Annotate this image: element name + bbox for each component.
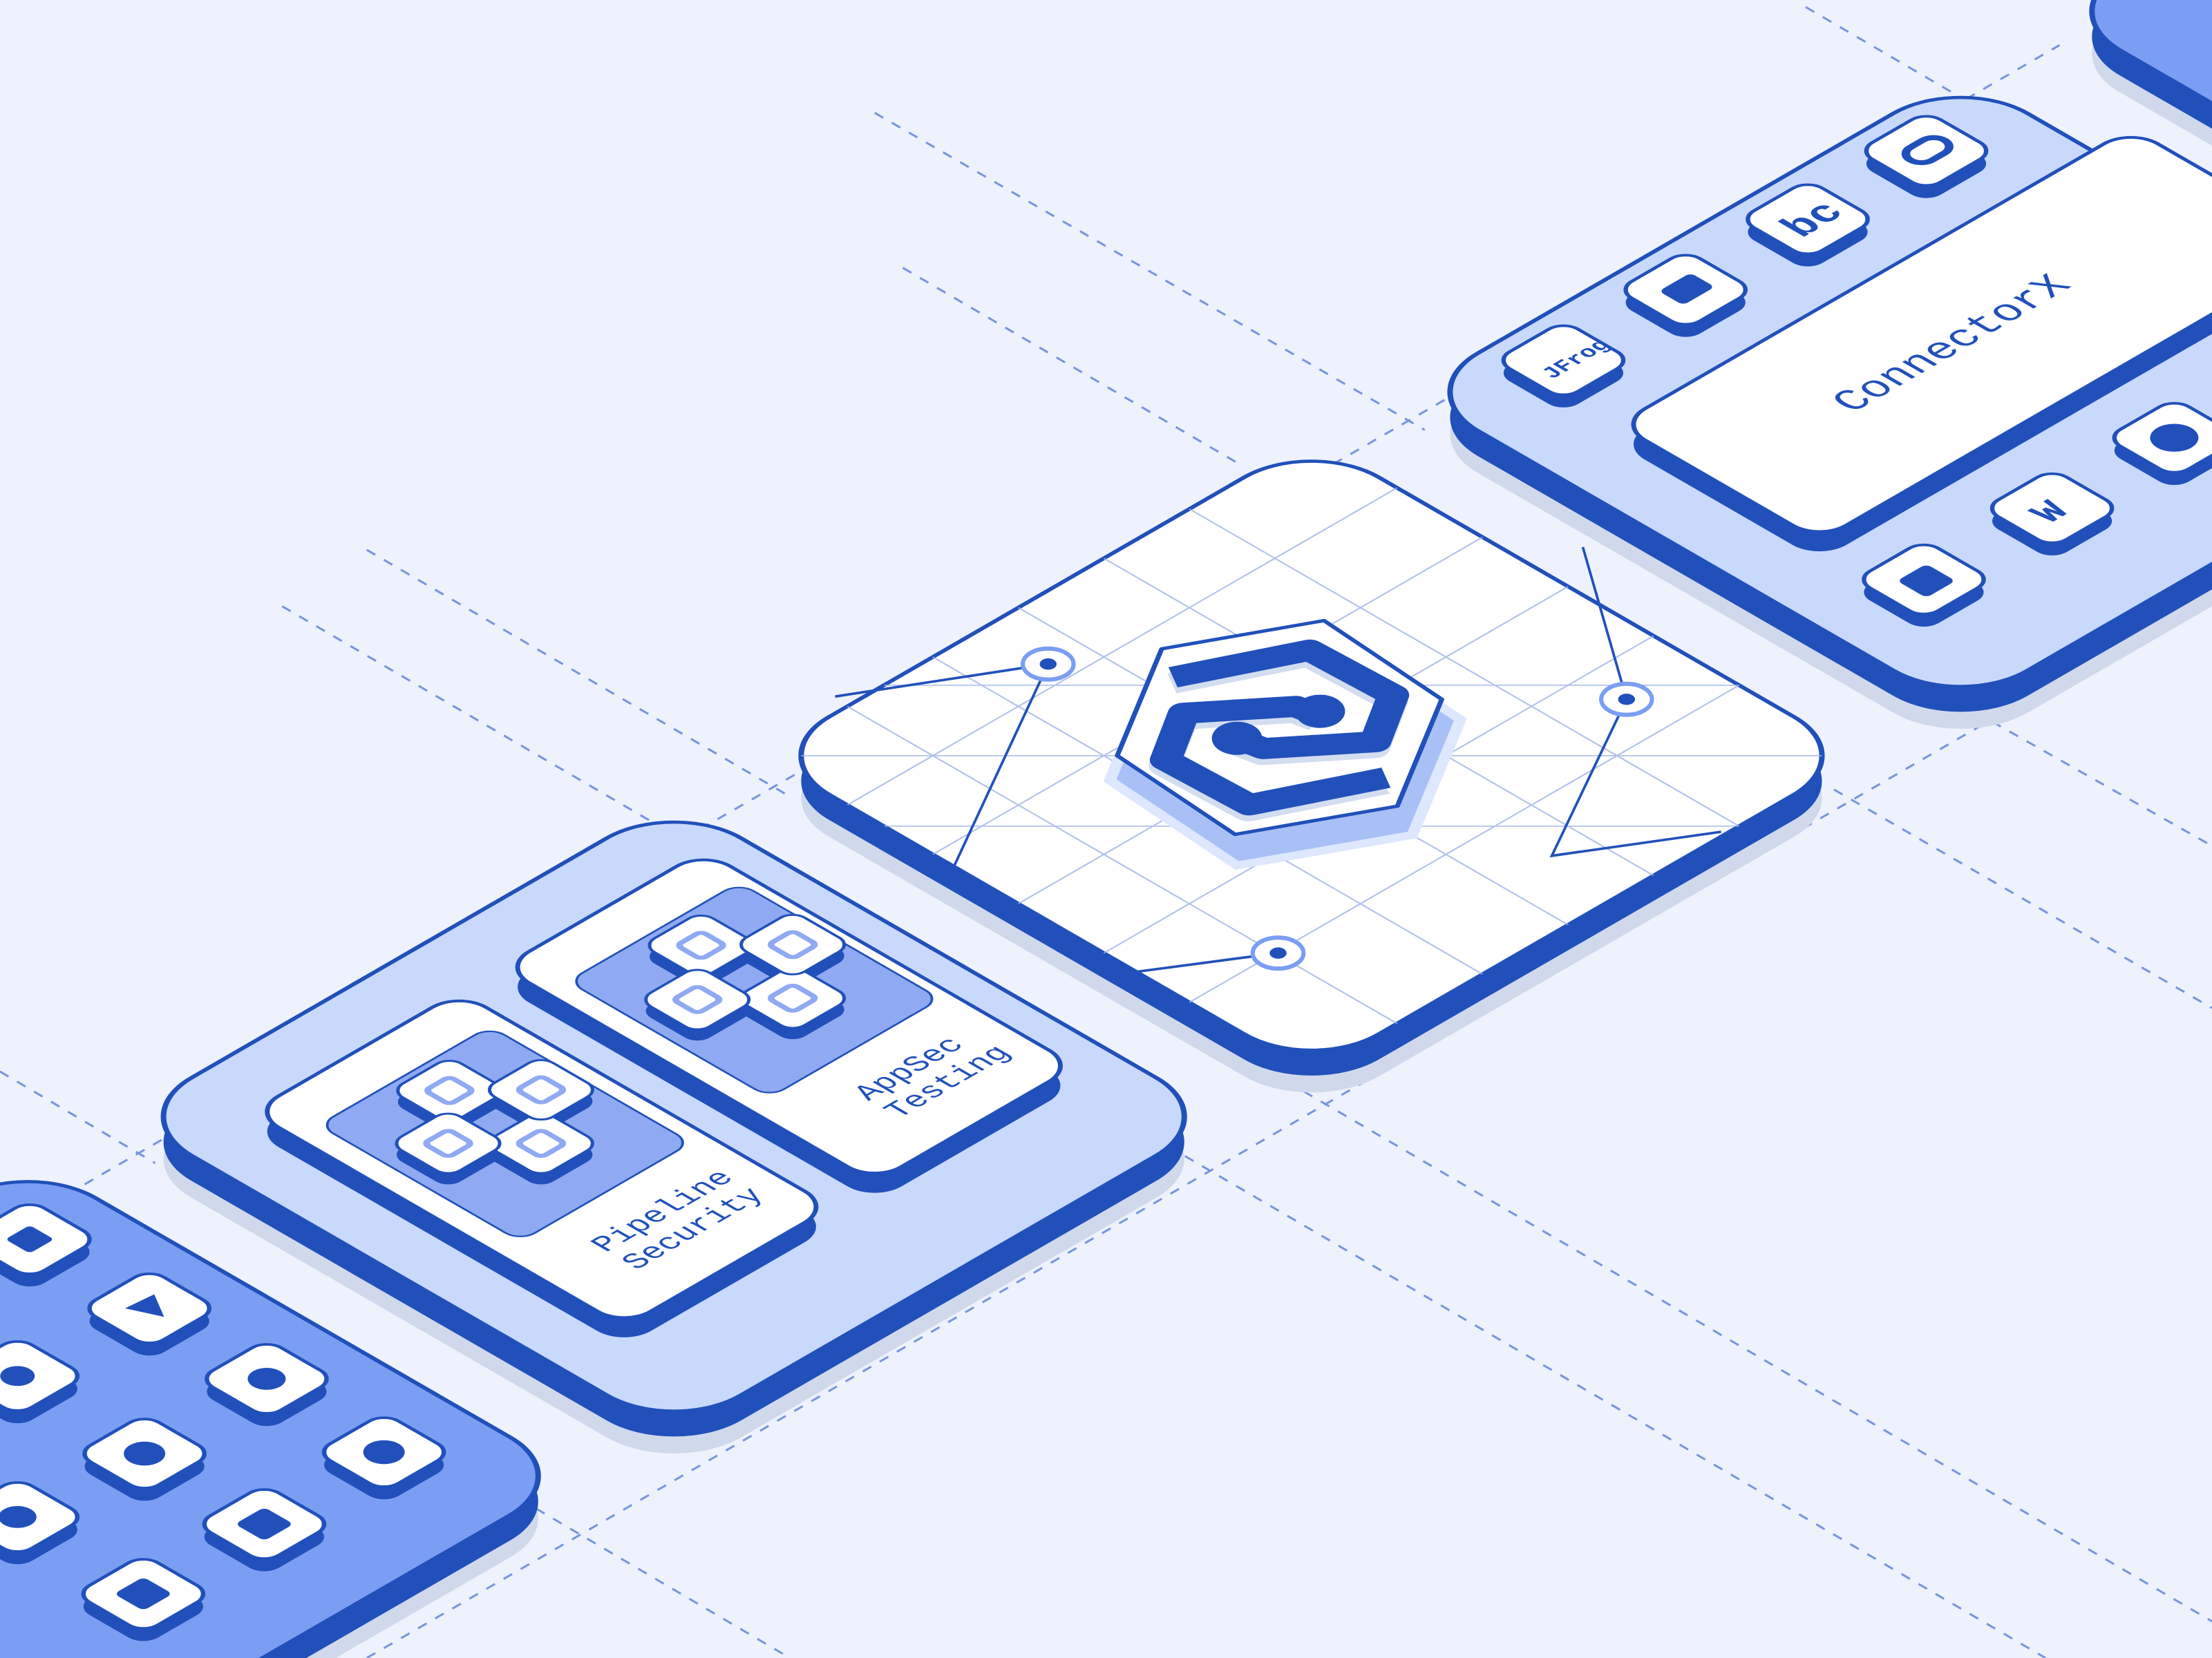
- icons: integrations: [1485, 111, 2212, 633]
- tile: pipeline / appsec: [124, 799, 1224, 1476]
- panel: Pipeline Security: Pipeline: [584, 1166, 743, 1257]
- icon: central hex logo: [1062, 607, 1508, 886]
- icons: integrations: JFrog: [1536, 336, 1617, 383]
- panel: AppSec Testing: Testing: [878, 1041, 1020, 1123]
- panel: Pipeline Security: [252, 992, 832, 1346]
- tile: ConnectorX: [1410, 75, 2212, 752]
- icon: connection dots: [1023, 649, 1652, 969]
- panel: AppSec Testing: AppSec: [847, 1033, 974, 1106]
- panel: ConnectorX: [1618, 128, 2212, 560]
- icons: integrations: bc: [1772, 196, 1857, 245]
- panel: Pipeline Security: Security: [615, 1183, 774, 1275]
- panel: AppSec Testing: [502, 851, 1076, 1202]
- icons: integrations: W: [2021, 495, 2081, 530]
- text: ConnectorX: ConnectorX: [1822, 269, 2083, 419]
- tile: top-right dark: [2052, 0, 2212, 371]
- tile: center logo: [798, 459, 1825, 1093]
- tile: bottom-left tools: [0, 1159, 578, 1658]
- icons: tools grid: [0, 1200, 462, 1646]
